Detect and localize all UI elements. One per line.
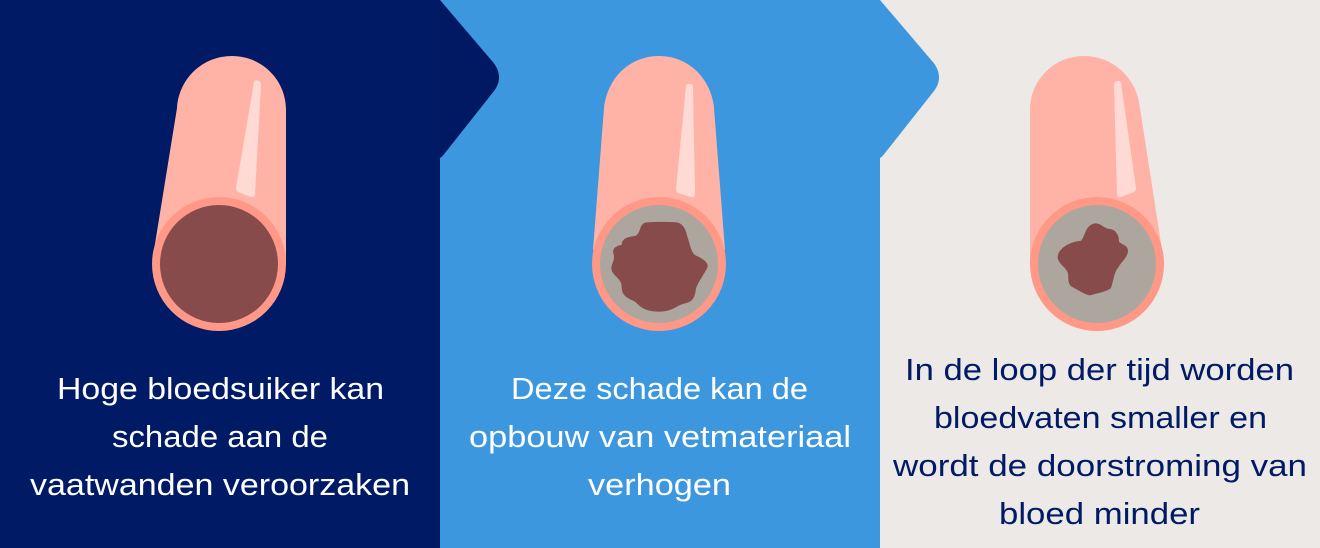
panel: fatty build-up: [440, 0, 880, 548]
icon: healthy blood vessel: [152, 56, 286, 331]
arrow: panel two to three: [880, 0, 939, 158]
text: panel two caption: opbouw van vetmateriaal: [469, 419, 851, 454]
arrow: panel one to two: [440, 0, 499, 158]
text: panel two caption: verhogen: [588, 467, 731, 502]
text: panel one caption: schade aan de: [112, 419, 328, 454]
text: panel three caption: [892, 352, 1307, 531]
panel: narrowed vessels: [880, 0, 1320, 548]
text: panel three caption: In de loop der tijd worden: [905, 352, 1294, 387]
text: panel one caption: Hoge bloedsuiker kan: [57, 371, 384, 406]
text: panel three caption: wordt de doorstroming van: [892, 448, 1307, 483]
text: panel three caption: bloedvaten smaller en: [934, 400, 1267, 435]
text: panel two caption: Deze schade kan de: [511, 371, 808, 406]
panel: high blood sugar: [0, 0, 440, 548]
icon: vessel with fatty build-up: [592, 56, 726, 331]
text: panel two caption: [469, 371, 851, 502]
text: panel one caption: [30, 371, 410, 502]
text: panel one caption: vaatwanden veroorzaken: [30, 467, 410, 502]
icon: narrowed blood vessel: [1030, 56, 1164, 331]
text: panel three caption: bloed minder: [999, 496, 1200, 531]
